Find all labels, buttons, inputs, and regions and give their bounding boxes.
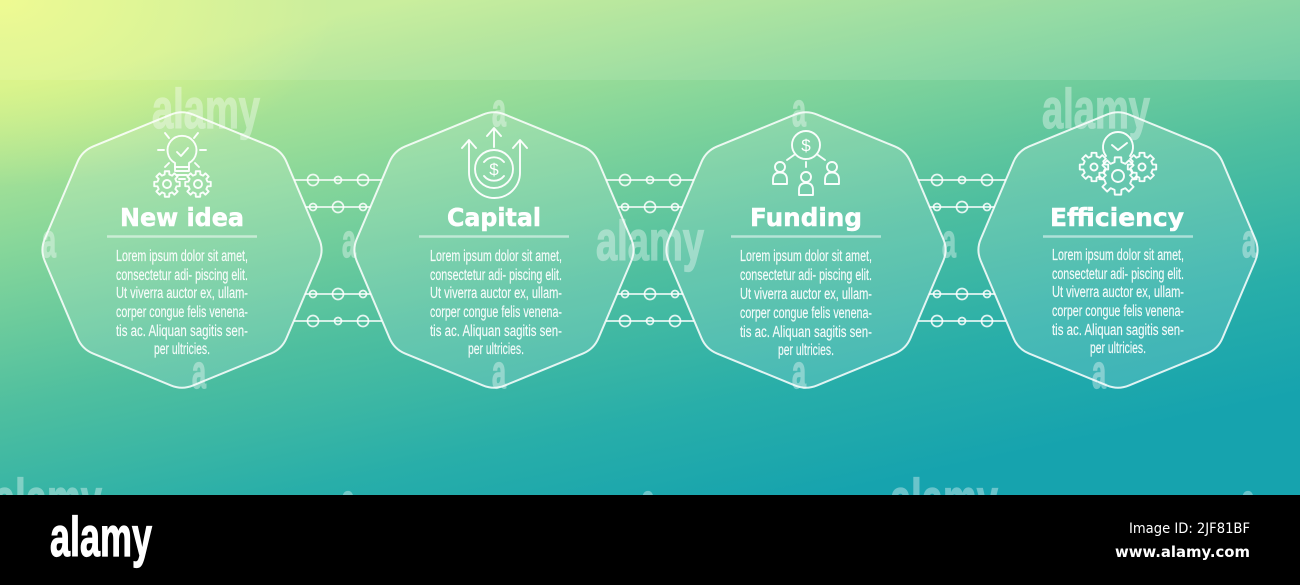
icon: gears with clock	[1080, 132, 1156, 195]
connector lines: step 2 to step 3	[606, 174, 694, 326]
image id: Image ID: 2JF81BF	[1129, 521, 1250, 537]
stock watermarks: a	[341, 474, 355, 527]
octagon outline	[978, 112, 1258, 388]
body text: corper congue felis venena-	[116, 304, 248, 321]
panel: Capital	[354, 112, 634, 388]
stock watermarks: alamy	[890, 467, 998, 530]
body text: per ultricies.	[468, 341, 524, 358]
stock watermarks: a	[792, 345, 806, 398]
body text: Ut viverra auctor ex, ullam-	[1052, 284, 1184, 301]
stock watermarks: a	[792, 83, 806, 136]
heading: Funding	[750, 203, 862, 232]
stock watermarks: a	[42, 214, 56, 267]
stock watermarks: a	[492, 345, 506, 398]
heading: Capital	[447, 203, 541, 232]
body text: tis ac. Aliquan sagitis sen-	[1052, 322, 1184, 339]
octagon outline	[354, 112, 634, 388]
stock watermarks: alamy	[152, 77, 260, 140]
heading: Efficiency	[1050, 203, 1184, 232]
connector lines: step 1 to step 2	[294, 174, 382, 326]
body text: Lorem ipsum dolor sit amet,	[116, 248, 248, 265]
stock watermarks: alamy	[596, 209, 704, 272]
body text: Lorem ipsum dolor sit amet,	[1052, 247, 1184, 264]
panel: Efficiency	[978, 112, 1258, 388]
divider rule	[419, 235, 569, 238]
stock watermarks: a	[1241, 474, 1255, 527]
body text: consectetur adi- piscing elit.	[116, 267, 248, 284]
icon: coin with rising arrows: $	[489, 160, 499, 179]
heading: New idea	[120, 203, 244, 232]
footer logo: alamy	[50, 505, 152, 568]
divider rule	[107, 235, 257, 238]
body text: consectetur adi- piscing elit.	[1052, 266, 1184, 283]
body text: tis ac. Aliquan sagitis sen-	[116, 323, 248, 340]
body text	[1052, 247, 1184, 357]
body text: Ut viverra auctor ex, ullam-	[116, 285, 248, 302]
body text: Lorem ipsum dolor sit amet,	[430, 248, 562, 265]
body text: per ultricies.	[778, 342, 834, 359]
stock watermarks: a	[342, 214, 356, 267]
divider rule	[1043, 235, 1193, 238]
panel: New idea	[42, 112, 322, 388]
octagon outline	[42, 112, 322, 388]
body text: corper congue felis venena-	[740, 305, 872, 322]
body text: tis ac. Aliquan sagitis sen-	[740, 324, 872, 341]
body text: consectetur adi- piscing elit.	[740, 267, 872, 284]
body text	[740, 248, 872, 359]
body text: consectetur adi- piscing elit.	[430, 267, 562, 284]
stock watermarks: a	[1092, 345, 1106, 398]
body text: per ultricies.	[1090, 340, 1146, 357]
icon: coin with rising arrows	[462, 128, 527, 198]
body text: Ut viverra auctor ex, ullam-	[740, 286, 872, 303]
body text: Ut viverra auctor ex, ullam-	[430, 285, 562, 302]
body text: Lorem ipsum dolor sit amet,	[740, 248, 872, 265]
body text: per ultricies.	[154, 341, 210, 358]
stock watermarks: a	[492, 83, 506, 136]
footer bar	[0, 495, 1300, 585]
divider rule	[731, 235, 881, 238]
stock watermarks: a	[192, 345, 206, 398]
body text: tis ac. Aliquan sagitis sen-	[430, 323, 562, 340]
stock watermarks: a	[641, 474, 655, 527]
website: www.alamy.com	[1115, 543, 1250, 561]
body text: corper congue felis venena-	[1052, 303, 1184, 320]
stock watermarks: alamy	[1042, 77, 1150, 140]
stock watermarks: a	[1242, 214, 1256, 267]
icon: money shared between people	[773, 131, 839, 195]
stock watermarks	[0, 77, 1256, 530]
octagon outline	[666, 112, 946, 388]
icon: money shared between people: $	[801, 136, 811, 155]
icon: light bulb with gears	[154, 133, 211, 197]
connector lines: step 3 to step 4	[918, 174, 1006, 326]
body text	[430, 248, 562, 358]
stock watermarks: a	[942, 214, 956, 267]
body text: corper congue felis venena-	[430, 304, 562, 321]
panel: Funding	[666, 112, 946, 388]
body text	[116, 248, 248, 358]
